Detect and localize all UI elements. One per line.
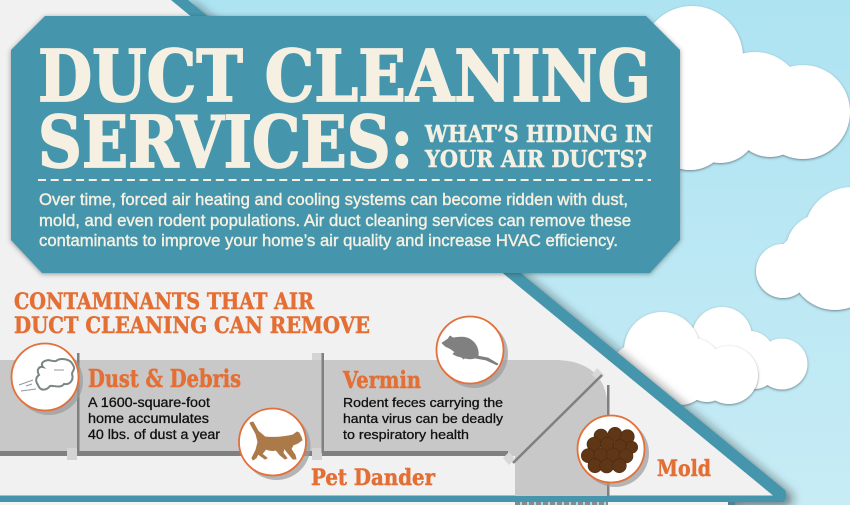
intro paragraph: mold, and even rodent populations. Air duct cleaning services can remove these bbox=[39, 212, 631, 230]
title: duct cleaning services: DUCT CLEANING bbox=[38, 34, 651, 118]
subtitle: WHAT’S HIDING IN bbox=[424, 121, 653, 148]
dust and debris text bbox=[88, 364, 241, 442]
vermin text: Rodent feces carrying the bbox=[343, 395, 503, 410]
cloud: right middle bbox=[756, 187, 850, 310]
icon: mold bbox=[578, 416, 649, 487]
section heading: CONTAMINANTS THAT AIR bbox=[14, 289, 315, 315]
section heading: DUCT CLEANING CAN REMOVE bbox=[14, 313, 370, 339]
intro paragraph: Over time, forced air heating and cooling systems can become ridden with dust, bbox=[39, 191, 628, 209]
vermin text: hanta virus can be deadly bbox=[343, 411, 504, 426]
dust and debris text: Dust & Debris bbox=[88, 364, 241, 393]
vermin text bbox=[342, 367, 504, 442]
title: duct cleaning services: SERVICES: bbox=[38, 100, 413, 184]
vermin text: Vermin bbox=[342, 367, 421, 394]
vermin text: to respiratory health bbox=[343, 427, 469, 442]
intro paragraph bbox=[39, 191, 631, 250]
mold label: Mold bbox=[657, 456, 711, 482]
subtitle bbox=[424, 121, 653, 173]
dust and debris text: 40 lbs. of dust a year bbox=[88, 427, 221, 442]
section heading bbox=[14, 289, 370, 339]
title: duct cleaning services bbox=[38, 34, 651, 184]
icon: dust cloud bbox=[12, 344, 83, 415]
subtitle: YOUR AIR DUCTS? bbox=[424, 146, 647, 173]
title panel bbox=[11, 16, 680, 273]
icon: cat bbox=[239, 408, 310, 480]
pet dander label: Pet Dander bbox=[311, 465, 435, 491]
air duct bbox=[0, 353, 610, 505]
cloud: rear lower bbox=[692, 307, 808, 390]
dust and debris text: A 1600-square-foot bbox=[88, 395, 210, 410]
cloud: top right bbox=[641, 6, 850, 170]
dust and debris text: home accumulates bbox=[88, 411, 209, 426]
icon: rat bbox=[436, 316, 508, 388]
intro paragraph: contaminants to improve your home’s air quality and increase HVAC efficiency. bbox=[39, 232, 618, 250]
cloud: front lower bbox=[608, 312, 758, 407]
